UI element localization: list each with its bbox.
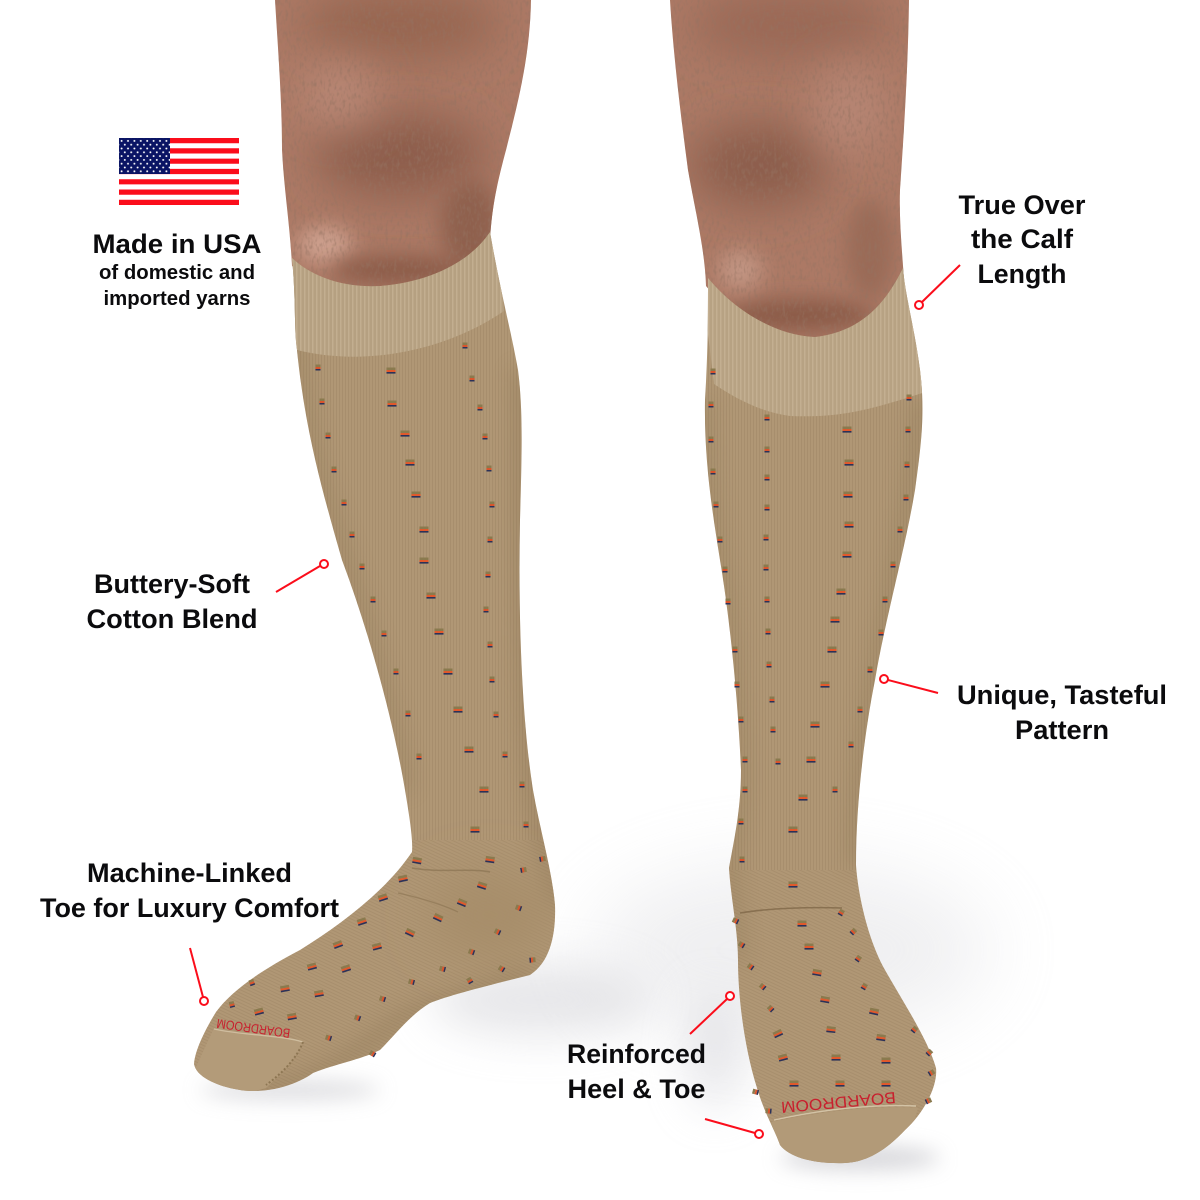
left sock	[194, 232, 556, 1091]
left toe	[196, 1030, 302, 1091]
callout: Machine-Linked Toe: Machine-Linked	[87, 858, 292, 888]
left leg skin	[275, 0, 531, 286]
floor shadows	[200, 865, 990, 1170]
callout: Unique, Tasteful Pattern: Unique, Tasteful	[957, 680, 1167, 710]
callout: Machine-Linked Toe	[40, 858, 339, 1005]
right cuff	[708, 268, 922, 416]
right leg skin	[670, 0, 909, 337]
callout: Buttery-Soft Cotton Blend: Cotton Blend	[86, 604, 258, 634]
text: Made in USA: imported yarns	[104, 288, 250, 310]
left sock dots	[229, 342, 546, 1057]
icon: US flag	[119, 138, 239, 205]
callout: Reinforced Heel and Toe	[567, 992, 763, 1138]
left toe brand text: BOARDROOM	[216, 1016, 291, 1041]
callout: True Over the Calf Length: True Over	[958, 190, 1086, 220]
right leg	[660, 0, 950, 1180]
callout: Buttery-Soft Cotton Blend	[86, 560, 328, 634]
text: Made in USA: Made in USA	[92, 229, 262, 259]
callout: Reinforced Heel and Toe: Reinforced	[567, 1039, 706, 1069]
right toe brand text: BOARDROOM	[780, 1088, 896, 1115]
callout: True Over the Calf Length: Length	[978, 259, 1066, 289]
callout: Unique, Tasteful Pattern	[880, 675, 1167, 745]
right sock	[704, 268, 936, 1164]
callout: True Over the Calf Length: the Calf	[971, 224, 1074, 254]
left leg	[194, 0, 556, 1091]
callout: Unique, Tasteful Pattern: Pattern	[1015, 715, 1109, 745]
callout: True Over the Calf Length	[915, 190, 1086, 309]
callout: Reinforced Heel and Toe: Heel & Toe	[568, 1074, 706, 1104]
text: Made in USA	[92, 229, 262, 310]
right toe	[772, 1108, 917, 1164]
text: Made in USA: of domestic and	[99, 262, 255, 284]
right sock dots	[708, 368, 935, 1114]
callout: Buttery-Soft Cotton Blend: Buttery-Soft	[94, 569, 250, 599]
callout: Machine-Linked Toe: Toe for Luxury Comfort	[40, 893, 339, 923]
left cuff	[285, 225, 504, 357]
